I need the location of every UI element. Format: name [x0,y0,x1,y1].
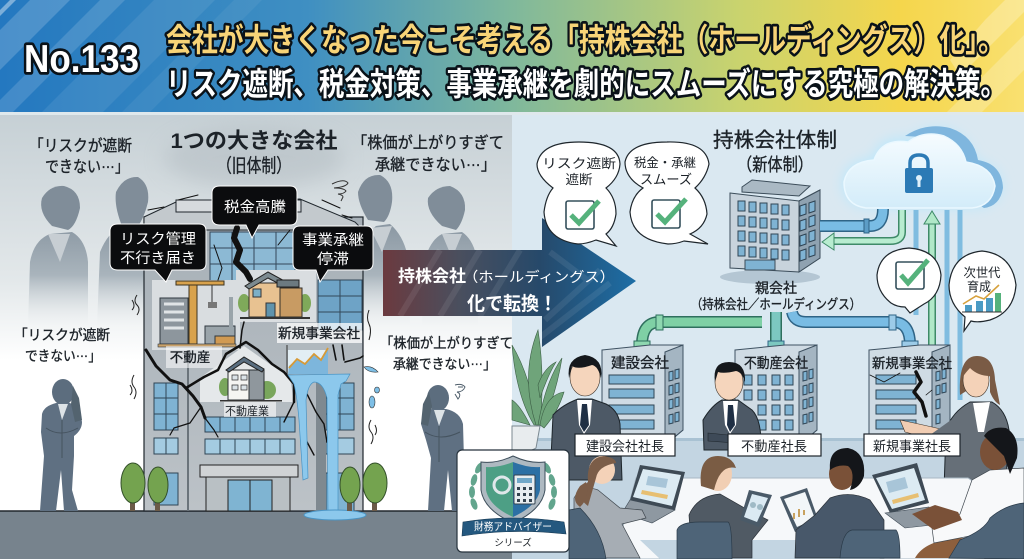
label: parent company: 親会社 [755,280,797,296]
new structure title: 持株会社体制 [713,129,837,152]
shield [481,456,545,523]
cracked old building [121,195,387,520]
rising chart [287,345,330,375]
meeting table [622,478,1024,559]
speech bubble: check [877,248,941,313]
small growth chart [962,285,1002,312]
quote top right: … [466,153,481,170]
ribbon [462,518,566,536]
quote top left: できない [45,159,109,176]
scribble above right figures [332,181,348,201]
upper glass facade [210,232,362,330]
pipes to subsidiaries [634,312,918,348]
quote lower left: できない [25,348,81,364]
name plate: construction president: 建設会社社長 [586,439,664,454]
old structure title [170,129,338,177]
quote lower left: 「リスクが遮断 [14,327,110,343]
building entrance [200,465,298,511]
speech bubble: tax and succession [625,142,709,244]
speech bubble: tax and succession: 税金・承継 [634,156,696,170]
worried ghost figures behind the old building [28,175,478,325]
callout: succession stall: 停滞 [317,251,349,268]
quote lower left: … [76,344,88,360]
label: real estate [166,346,222,368]
name plate: new business president: 新規事業社長 [873,439,951,454]
plant [512,330,564,452]
seated person with tablet, dark hair [780,448,900,558]
cloud with lock [842,126,1003,208]
mid house scene [200,346,294,418]
speech bubble: risk block: 遮断 [566,172,592,187]
series number: No.133 [24,38,139,81]
label: new business company: 新規事業会社 [278,326,361,341]
title banner [0,0,1024,115]
trees [121,463,387,511]
subsidiary: new business company with crack [869,345,952,445]
series badge [457,450,569,552]
label: parent company: （持株会社／ホールディングス） [691,296,861,312]
transformation arrow [383,218,636,347]
quote top right: 「株価が上がりすぎて [352,134,504,152]
name plate: construction president [575,434,675,456]
quote top left: 「リスクが遮断 [29,137,132,155]
pipes between parent and cloud [820,209,960,400]
transformation arrow: 化で転換！ [467,292,557,315]
mid house scene: 不動産業 [225,404,269,418]
water leak [288,367,380,520]
callout: risk management: 不行き届き [120,250,196,267]
crane and construction scene [152,280,240,350]
worried man left [40,379,82,511]
subsidiary: real estate company: 不動産会社 [744,355,808,371]
parent company building [720,180,820,284]
panel: left old structure background [0,114,512,559]
worried man right [421,384,470,511]
new structure title [713,129,837,175]
cracks [146,195,363,455]
panel: right new structure background [512,114,1024,559]
laptop left [622,465,685,523]
label: real estate: 不動産 [170,350,210,365]
speech bubble: risk block: リスク遮断 [542,156,616,171]
callout: tax surge: 税金高騰 [224,198,287,216]
quote top left: 」 [115,159,129,176]
transformation arrow: （ホールディングス） [463,269,615,285]
quote lower right [380,335,513,372]
speech bubble: next generation: 育成 [967,279,991,294]
subsidiary: construction company [602,345,683,445]
lock icon [905,155,933,193]
subsidiary: new business company with crack: 新規事業会社 [872,356,952,371]
house scene [236,270,316,322]
name plate: new business president [864,434,960,456]
laptop right [872,463,932,528]
speech bubble: next generation: 次世代 [964,266,1001,280]
quote top right: 承継できない [375,157,471,174]
shake marks [130,295,376,444]
arrow text: 持株会社 [398,267,466,286]
quote lower left: 」 [88,348,101,364]
quote lower right: 承継できない [393,356,477,372]
quote top left [29,137,132,176]
president: real estate [703,362,761,450]
speech bubble: next generation [949,251,1016,331]
callout: risk management: リスク管理 [120,230,197,248]
quote top right: 」 [481,157,496,174]
name plate: real estate president: 不動産社長 [741,439,807,454]
seated woman [569,456,646,559]
subsidiary: construction company: 建設会社 [611,355,669,372]
series badge: シリーズ [494,537,532,549]
quote lower right: … [470,352,483,368]
speech bubble: risk block [537,142,620,246]
name plate: real estate president [728,434,821,456]
quote top left: … [101,155,115,172]
callout: succession stall [293,226,373,282]
callout: risk management [110,224,206,282]
seated person with tablet [677,456,772,559]
old structure title: （旧体制） [217,155,291,177]
president: construction [550,355,622,480]
laurel [469,461,557,511]
quote lower right: 「株価が上がりすぎて [380,335,513,351]
old structure title: 1つの大きな会社 [170,129,338,153]
speech bubble: tax and succession: スムーズ [640,172,692,187]
callout: succession stall: 事業承継 [302,232,364,249]
callout: tax surge [212,186,297,238]
seated person in white shirt [912,428,1024,559]
quote top right [352,134,504,174]
subsidiary: real estate company [735,345,817,445]
lower window rows [154,378,354,511]
series badge: 財務アドバイザー [474,520,552,533]
president: new business [900,356,1009,500]
new structure title: （新体制） [737,155,813,175]
quote lower right: 」 [483,356,496,372]
quote lower left [14,327,110,364]
label: parent company [691,280,861,312]
